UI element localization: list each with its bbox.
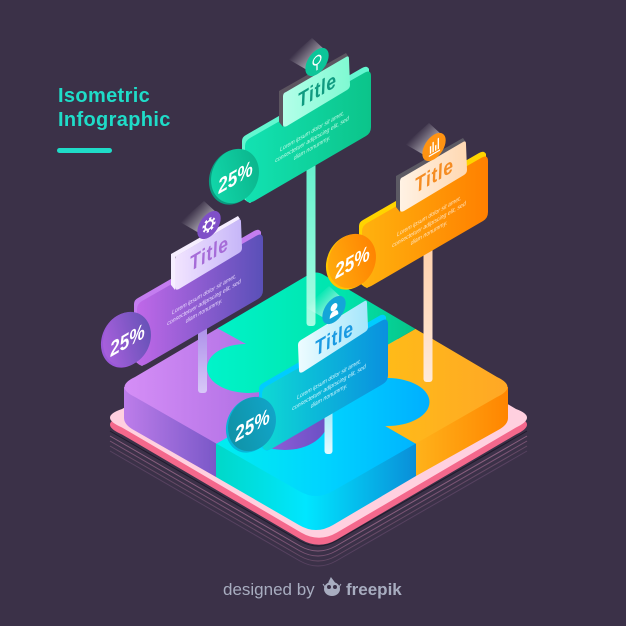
body text: Lorem ipsum dolor sit amet,: [297, 359, 361, 401]
piece: purple: [124, 327, 259, 444]
panel back: [134, 230, 261, 366]
card: [298, 301, 368, 373]
body text: consectetuer adipiscing elit, sed: [275, 116, 349, 165]
pole: [306, 158, 316, 326]
title: Infographic: [58, 109, 171, 131]
body text: diam nonummy.: [294, 135, 330, 162]
title: [57, 85, 171, 153]
icon: person: [322, 291, 346, 329]
pole: [198, 321, 207, 393]
icon beam: [405, 123, 442, 155]
card: [283, 56, 350, 127]
marker: green: [200, 38, 371, 326]
puzzle: top surface: [124, 272, 508, 496]
title text: Title: [297, 69, 338, 113]
tab: purple into cyan: [258, 396, 324, 450]
icon: freepik logo: [323, 578, 341, 596]
percent bubble: [317, 226, 385, 298]
body text: Lorem ipsum dolor sit amet,: [280, 111, 344, 153]
title text: Title: [314, 317, 355, 361]
card: [400, 141, 467, 212]
title text: Title: [189, 232, 230, 276]
card: [175, 219, 242, 290]
percent bubble: 25%: [216, 157, 254, 199]
tab: cyan into orange: [348, 378, 430, 426]
panel face: [362, 157, 488, 287]
body text: Lorem ipsum dolor sit amet,: [172, 274, 236, 316]
body text: Lorem ipsum dolor sit amet,: [397, 196, 461, 238]
footer: designed by freepik: freepik: [346, 580, 402, 599]
body text: diam nonummy.: [186, 298, 222, 325]
card edge: [279, 53, 348, 127]
panel face: [245, 72, 371, 202]
pole: [424, 243, 432, 382]
icon beam: [180, 201, 217, 233]
panel back: [259, 315, 386, 451]
percent bubble: 25%: [333, 242, 371, 284]
piece: cyan: [216, 417, 416, 496]
card edge: [396, 138, 465, 212]
body text: consectetuer adipiscing elit, sed: [392, 201, 466, 250]
percent bubble: [92, 304, 160, 376]
marker: orange: [317, 123, 488, 382]
body text: consectetuer adipiscing elit, sed: [167, 279, 241, 328]
icon: gear: [197, 206, 221, 244]
icon: bar chart: [422, 128, 446, 166]
pole: [324, 406, 332, 454]
body text: diam nonummy.: [411, 220, 447, 247]
body text: diam nonummy.: [311, 383, 347, 410]
percent bubble: [217, 389, 285, 461]
piece: green: [207, 262, 417, 393]
marker: blue: [217, 286, 388, 461]
panel face: [262, 320, 388, 450]
footer: designed by freepik: designed by: [223, 580, 315, 599]
platform: stacked line shadow: [110, 431, 527, 566]
title: Isometric: [58, 85, 150, 107]
title text: Title: [414, 154, 455, 198]
body text: consectetuer adipiscing elit, sed: [292, 364, 366, 413]
icon beam: [305, 286, 342, 318]
icon beam: [288, 38, 325, 70]
footer: designed by freepik: [223, 578, 402, 599]
percent bubble: [200, 141, 268, 213]
percent bubble: 25%: [108, 320, 146, 362]
panel back: [359, 152, 486, 288]
puzzle: side walls: [124, 387, 508, 530]
panel face: [137, 235, 263, 365]
percent bubble: 25%: [233, 405, 271, 447]
icon: magnifier: [305, 43, 329, 81]
marker: purple: [92, 201, 263, 393]
platform: pink base: [110, 297, 527, 545]
card edge: [171, 216, 240, 290]
panel back: [242, 67, 369, 203]
piece: orange: [385, 329, 508, 444]
